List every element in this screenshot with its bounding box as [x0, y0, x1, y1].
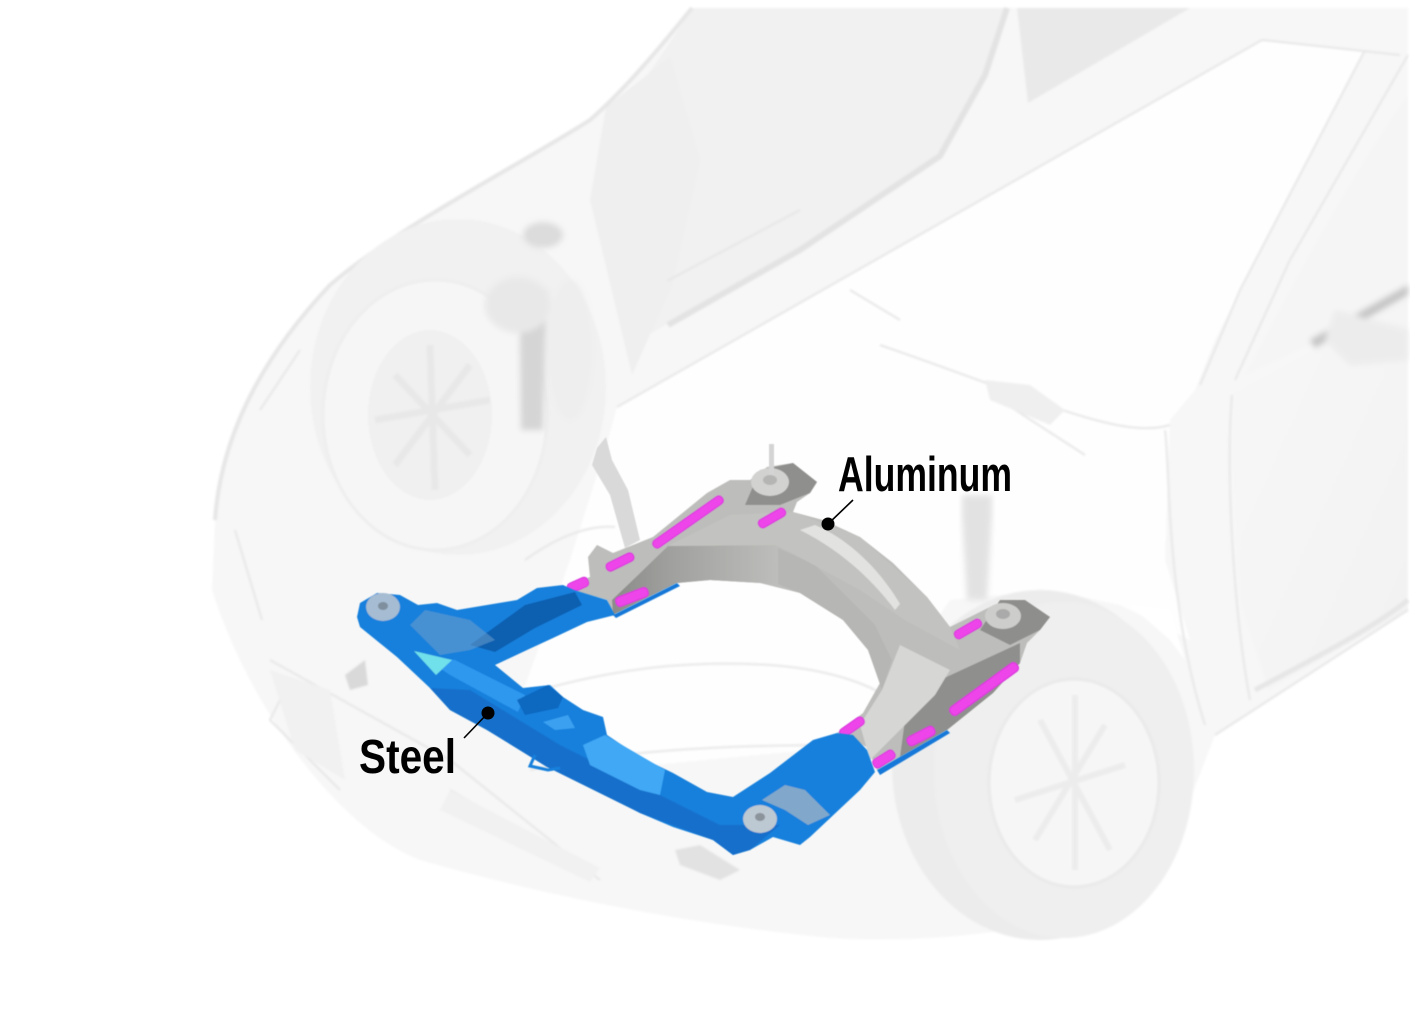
rear door glass	[1245, 95, 1408, 375]
Steel text: Steel	[359, 731, 456, 784]
lower harness	[675, 845, 740, 880]
aluminum body	[570, 463, 1050, 770]
steel lower shade	[430, 688, 780, 855]
tow bracket ghost	[345, 660, 368, 690]
car body shell	[212, 8, 1408, 939]
tow loop	[530, 755, 560, 770]
door panel	[1232, 300, 1408, 690]
highlight ridge	[800, 525, 900, 610]
mount bushing rear	[751, 444, 789, 496]
steel face highlight right	[583, 735, 665, 795]
lower bumper	[440, 790, 600, 882]
mid channel light	[543, 715, 575, 730]
Steel leader	[464, 713, 488, 738]
top light surface	[668, 512, 960, 650]
steel top light face	[420, 655, 525, 712]
right node dark	[900, 643, 1020, 757]
left front wheel	[310, 219, 606, 555]
right front wheel	[892, 590, 1194, 940]
steel dark arm channel	[470, 592, 582, 652]
Steel dot	[482, 706, 494, 720]
blue underside strips	[613, 583, 950, 775]
windshield lower moulding	[668, 8, 1007, 325]
A pillar inner band	[590, 57, 700, 375]
mid bracket	[517, 685, 563, 715]
windshield	[605, 8, 1007, 345]
Aluminum leader	[828, 500, 853, 524]
right bushing	[743, 805, 777, 833]
Aluminum text: Aluminum	[838, 448, 1012, 502]
mount bushing right	[980, 600, 1050, 645]
underside wall middle	[778, 548, 892, 690]
hood white area	[520, 40, 1365, 770]
right side mirror	[1310, 285, 1408, 365]
Aluminum dot	[822, 518, 834, 530]
ghost overlay right node	[762, 785, 830, 825]
label: Steel	[359, 706, 494, 784]
magenta joints	[566, 494, 1020, 770]
central node light	[860, 645, 950, 760]
aluminum suspension bracket left	[592, 437, 640, 548]
underside wall left	[612, 545, 778, 615]
white arch gap	[1130, 605, 1185, 660]
side glass	[1017, 8, 1190, 103]
cowl linkage	[985, 380, 1065, 425]
right strut	[962, 495, 992, 600]
ghost car body	[212, 8, 1408, 940]
left bushing	[366, 593, 400, 621]
label: Aluminum	[822, 448, 1012, 530]
steel front subframe	[357, 583, 950, 855]
car outline strokes	[215, 8, 1408, 880]
cyan highlight	[414, 651, 452, 675]
steel body	[357, 585, 875, 855]
top mount	[745, 463, 817, 505]
aluminum rear subframe	[566, 437, 1050, 770]
front grille	[270, 670, 345, 780]
ghost overlay left node	[410, 610, 495, 655]
left strut	[485, 222, 592, 430]
